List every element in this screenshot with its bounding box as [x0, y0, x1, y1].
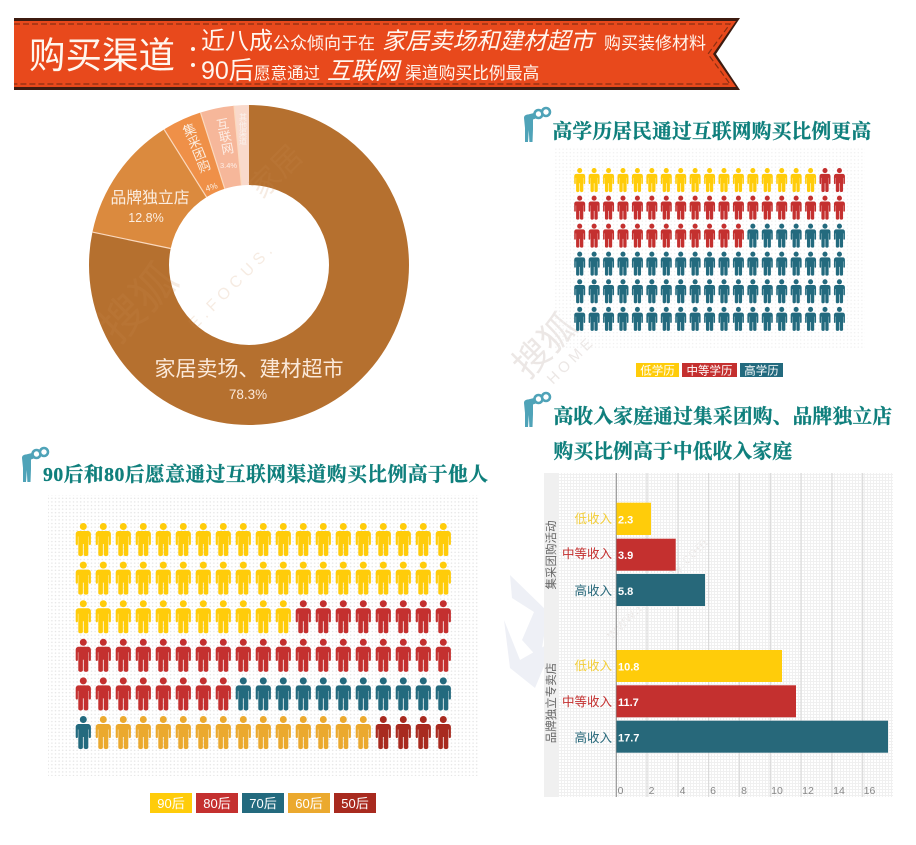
section heading: income: 购买比例高于中低收入家庭	[554, 440, 792, 463]
watermarks: 搜狐	[505, 306, 585, 386]
x axis labels: 14	[833, 785, 845, 797]
banner line 2: 互联网	[327, 58, 402, 85]
group: brand stores: 低收入	[574, 659, 612, 673]
group: group buying: 3.9	[618, 550, 633, 562]
group: brand stores	[544, 650, 888, 753]
section heading: education: 高学历居民通过互联网购买比例更高	[552, 120, 871, 143]
banner line 2: 渠道购买比例最高	[405, 64, 539, 83]
donut chart: purchase channels: 12.8%	[128, 211, 164, 225]
banner line 1: 公众倾向于在	[273, 34, 375, 53]
donut chart: purchase channels: 78.3%	[229, 387, 267, 402]
legend: education	[636, 363, 783, 378]
donut label: brand stores: 品牌独立店	[110, 189, 190, 207]
group: brand stores: 17.7	[618, 732, 639, 744]
pictogram: age	[48, 495, 478, 776]
watermarks: HOME	[544, 333, 599, 388]
legend: age: 70后	[249, 796, 277, 811]
pictogram: education	[553, 147, 865, 350]
x axis labels	[618, 785, 875, 797]
x axis labels: 12	[802, 785, 814, 797]
group: group buying: 中等收入	[562, 546, 612, 561]
icon: man with binoculars	[22, 448, 48, 482]
donut label: group buying: 集采团购	[179, 121, 213, 175]
banner line 1: 家居卖场和建材超市	[382, 28, 597, 54]
section heading: income	[524, 393, 892, 463]
group: brand stores: 高收入	[574, 730, 612, 745]
x axis labels: 6	[710, 785, 716, 797]
legend: education: 中等学历	[686, 364, 732, 378]
donut label: home stores: 家居卖场、建材超市	[154, 358, 344, 381]
group: brand stores: 品牌独立专卖店	[544, 663, 558, 743]
x axis labels: 2	[649, 785, 655, 797]
icon: man with binoculars	[524, 393, 550, 427]
donut label: group buying value: 4%	[204, 180, 219, 194]
legend: age: 90后	[157, 796, 185, 811]
group: group buying: 5.8	[618, 586, 633, 598]
legend: education: 低学历	[640, 364, 675, 378]
donut chart: purchase channels	[92, 106, 369, 402]
banner line 1: 近八成	[201, 28, 273, 55]
group: brand stores: 11.7	[618, 697, 639, 709]
icon: man with binoculars	[524, 108, 550, 142]
legend: age	[150, 793, 376, 813]
watermarks: E.FOCUS.	[186, 239, 280, 333]
x axis labels: 4	[680, 785, 686, 797]
donut label: internet value: 3.4%	[220, 161, 237, 170]
section heading: age	[22, 448, 488, 486]
banner line 2: 愿意通过	[254, 64, 320, 83]
banner ribbon shape	[14, 18, 740, 90]
x axis labels: 0	[618, 785, 624, 797]
x axis labels: 8	[741, 785, 747, 797]
banner line 2: 90后	[201, 57, 254, 85]
group: group buying: 低收入	[574, 512, 612, 526]
banner bullets	[191, 47, 195, 67]
section heading: income: 高收入家庭通过集采团购、品牌独立店	[554, 405, 892, 428]
section heading: age: 90后和80后愿意通过互联网渠道购买比例高于他人	[43, 463, 488, 486]
group: brand stores: 10.8	[618, 662, 639, 674]
group: group buying: 2.3	[618, 514, 633, 526]
group: group buying: 高收入	[574, 583, 612, 598]
legend: age: 50后	[341, 796, 369, 811]
group: group buying: 集采团购活动	[544, 520, 558, 590]
x axis labels: 16	[864, 785, 875, 797]
watermarks: 搜狐	[90, 255, 187, 352]
legend: education: 高学历	[744, 364, 779, 378]
watermarks: 家居	[244, 139, 309, 205]
x axis labels: 10	[771, 785, 783, 797]
legend: age: 60后	[295, 796, 323, 811]
banner title: 购买渠道	[29, 35, 175, 76]
watermarks: www.lizankey.com	[602, 534, 712, 644]
donut label: internet: 互联网	[213, 117, 234, 156]
group: group buying	[544, 503, 705, 606]
bar chart: income	[544, 473, 893, 797]
banner line 1: 购买装修材料	[604, 34, 706, 53]
banner	[14, 18, 740, 90]
legend: age: 80后	[203, 796, 231, 811]
section heading: education	[524, 108, 871, 143]
watermarks	[90, 139, 712, 688]
donut label: others: 其他渠道	[238, 113, 248, 146]
group: brand stores: 中等收入	[562, 694, 612, 709]
